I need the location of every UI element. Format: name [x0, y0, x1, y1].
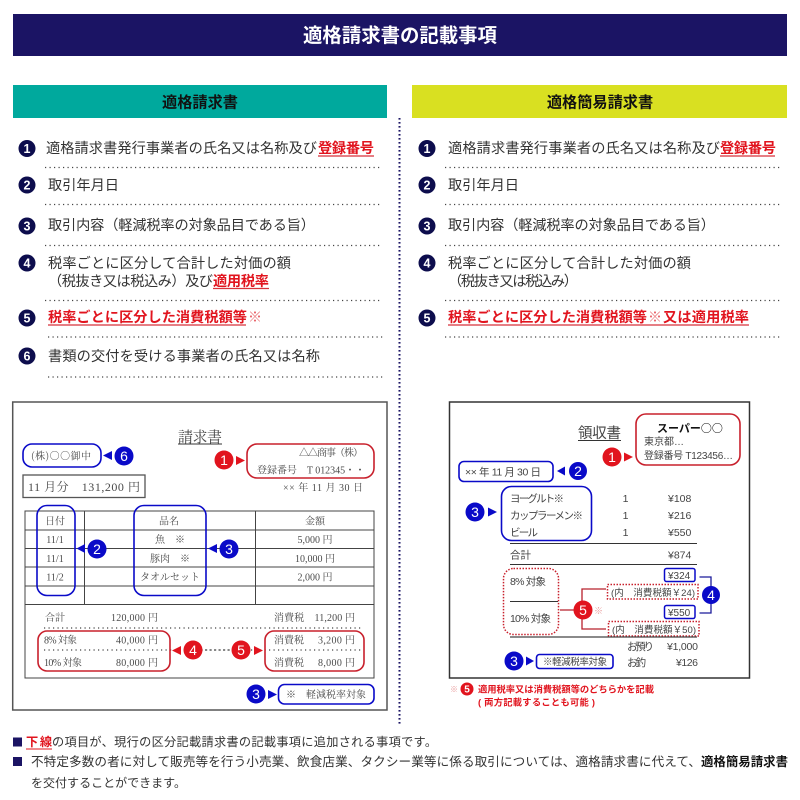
item 5: ※	[648, 309, 662, 325]
invoice table: 40,000 円	[116, 634, 158, 646]
tax rates box	[504, 568, 558, 634]
item 6: 書類の交付を受ける事業者の氏名又は名称	[48, 349, 320, 365]
marker 5 connector: ※	[594, 606, 603, 616]
invoice table: 2,000 円	[298, 572, 332, 584]
invoice table: 消費税	[274, 634, 304, 646]
date box and marker 2	[459, 462, 587, 482]
invoice table: 豚肉 ※	[150, 553, 190, 565]
issuer box and marker 1: △△商事（株）	[299, 444, 363, 459]
item 5: ※	[248, 309, 262, 325]
item 4: 4	[424, 256, 431, 270]
tax rate highlights with markers 4 and 5: 4	[189, 642, 197, 658]
item 2: 2	[24, 178, 31, 192]
heading: 適格請求書	[13, 85, 387, 118]
reduced tax note with marker 3: 3	[252, 686, 260, 702]
invoice table: 品名	[159, 514, 179, 528]
items box and marker 3: ヨーグルト※	[510, 492, 564, 505]
recipient box and marker 6: (株)○○御中	[31, 448, 91, 462]
issuer box and marker 1: 東京都…	[644, 435, 684, 448]
item 3: 3	[24, 220, 31, 234]
panel: 適格請求書 list	[13, 85, 387, 377]
invoice table: 80,000 円	[116, 657, 158, 669]
footer notes	[13, 734, 788, 790]
receipt footnote: ( 両方記載することも可能 )	[478, 696, 595, 708]
invoice title: 請求書	[178, 429, 222, 446]
invoice table: 10,000 円	[295, 553, 335, 565]
payment and change: お預り	[627, 641, 654, 653]
date box and marker 2: 2	[574, 463, 582, 479]
item 4: （税抜き又は税込み）	[448, 274, 578, 290]
panel: 領収書 sample receipt	[450, 402, 750, 678]
items box and marker 3: 3	[471, 504, 479, 520]
item 5: 5	[424, 312, 431, 326]
item 5: 又は適用税率	[663, 309, 749, 326]
invoice table: 消費税	[274, 656, 304, 669]
heading: 適格請求書: 適格請求書	[162, 94, 238, 112]
title: 適格請求書の記載事項	[303, 24, 498, 47]
receipt footnote: 5	[464, 684, 470, 696]
reduced tax note with marker 3	[246, 684, 374, 704]
subtotal boxes	[664, 568, 695, 619]
item 6: 6	[24, 350, 31, 364]
reduced tax note with marker 3: 3	[510, 653, 518, 669]
item 1: 1	[424, 142, 431, 156]
item 2: 取引年月日	[48, 178, 119, 194]
invoice table: 11/1	[46, 535, 64, 546]
reduced tax note with marker 3: ※ 軽減税率対象	[286, 688, 366, 701]
item 5	[418, 309, 749, 326]
recipient box and marker 6: 6	[120, 448, 128, 464]
issuer box and marker 1: 登録番号 T123456…	[644, 449, 733, 462]
payment and change	[627, 641, 698, 669]
date and item name highlights with markers 2 and 3	[37, 506, 238, 596]
tax rate highlights with markers 4 and 5: 5	[237, 642, 245, 658]
date box and marker 2: ×× 年 11 月 30 日	[465, 466, 541, 478]
invoice table: 日付	[45, 514, 65, 528]
items box and marker 3: ビール	[510, 527, 538, 539]
issuer box and marker 1	[602, 414, 740, 466]
quantities and prices: ¥550	[667, 527, 692, 539]
item 4	[18, 254, 291, 290]
date and item name highlights with markers 2 and 3: 2	[93, 541, 101, 557]
recipient box and marker 6	[23, 444, 134, 467]
item 4: 税率ごとに区分して合計した対価の額	[48, 256, 291, 272]
item 2: 取引年月日	[448, 178, 519, 194]
item 3: 取引内容（軽減税率の対象品目である旨）	[448, 217, 715, 234]
item 4: 適用税率	[213, 273, 269, 290]
marker 4 connector: 4	[707, 587, 715, 603]
item 4	[418, 254, 691, 290]
payment and change: ¥126	[675, 657, 698, 669]
date and item name highlights with markers 2 and 3: 3	[225, 541, 233, 557]
item 5: 税率ごとに区分した消費税額等	[48, 309, 247, 326]
payment and change: お釣	[627, 656, 646, 669]
invoice table: 8% 対象	[44, 634, 77, 646]
receipt total: 合計	[510, 548, 531, 562]
issuer box and marker 1: スーパー○○	[657, 420, 723, 436]
item 5: 5	[24, 312, 31, 326]
receipt footnote: 適用税率又は消費税額等のどちらかを記載	[478, 684, 655, 694]
note 2: 不特定多数の者に対して販売等を行う小売業、飲食店業、タクシー業等に係る取引については、適格請求書に代えて、	[31, 754, 701, 769]
items box and marker 3: カップラーメン※	[510, 510, 583, 522]
reduced tax note with marker 3	[504, 652, 613, 670]
quantities and prices: 1	[623, 510, 629, 522]
item 1: 1	[24, 142, 31, 156]
invoice table: 合計	[45, 611, 65, 624]
receipt footnote: ※	[450, 685, 458, 694]
invoice table: 8,000 円	[318, 657, 355, 669]
subtotal boxes: ¥324	[667, 571, 691, 582]
note 2: 適格簡易請求書	[701, 754, 788, 769]
invoice table: タオルセット	[140, 572, 200, 584]
tax rates box: 10% 対象	[510, 612, 552, 625]
invoice table: 120,000 円	[111, 612, 158, 624]
subtotal boxes: ¥550	[667, 608, 691, 619]
quantities and prices: ¥108	[667, 493, 692, 505]
invoice table: 金額	[305, 514, 326, 528]
items box and marker 3	[466, 486, 592, 540]
panel: 適格簡易請求書 list	[412, 85, 787, 337]
item 1: 適格請求書発行事業者の氏名又は名称及び	[46, 141, 317, 157]
item 1: 登録番号	[720, 141, 776, 157]
heading: 適格簡易請求書	[412, 85, 787, 118]
invoice table: 魚 ※	[155, 533, 185, 546]
note 1: の項目が、現行の区分記載請求書の記載事項に追加される事項です。	[52, 734, 437, 749]
quantities and prices: 1	[623, 493, 629, 505]
quantities and prices: 1	[623, 527, 629, 539]
invoice table: 消費税 11,200 円	[274, 611, 355, 624]
central dotted divider	[398, 118, 400, 724]
invoice table	[25, 511, 374, 678]
issuer box and marker 1: ×× 年 11 月 30 日	[283, 481, 363, 494]
invoice table: 11/2	[46, 572, 64, 584]
payment and change: ¥1,000	[666, 641, 698, 653]
invoice table: 3,200 円	[318, 634, 355, 646]
item 2	[18, 176, 119, 194]
invoice total box: 11 月分 131,200 円	[28, 480, 140, 494]
item 4: （税抜き又は税込み）及び	[48, 274, 213, 290]
consumption tax boxes	[608, 584, 699, 636]
item 3: 取引内容（軽減税率の対象品目である旨）	[48, 217, 315, 234]
invoice table: 10% 対象	[44, 656, 82, 669]
item 5: 税率ごとに区分した消費税額等	[448, 309, 647, 326]
consumption tax boxes: (内 消費税額￥24)	[611, 587, 695, 599]
receipt title: 領収書	[578, 425, 621, 442]
item 2	[418, 176, 519, 194]
issuer box and marker 1	[214, 444, 374, 494]
tax rates box: 8% 対象	[510, 575, 546, 588]
title	[13, 14, 787, 56]
issuer box and marker 1: 1	[220, 452, 228, 468]
invoice total box	[23, 475, 145, 498]
marker 5 connector: 5	[579, 602, 587, 618]
panel: 請求書 sample invoice	[13, 402, 387, 710]
reduced tax note with marker 3: ※軽減税率対象	[543, 656, 607, 668]
quantities and prices	[623, 493, 692, 539]
item 3: 3	[424, 220, 431, 234]
heading: 適格簡易請求書: 適格簡易請求書	[547, 94, 653, 112]
receipt total: ¥874	[667, 550, 692, 562]
note 2	[13, 754, 788, 790]
invoice table: 11/1	[46, 554, 64, 565]
quantities and prices: ¥216	[667, 510, 692, 522]
receipt footnote	[450, 682, 655, 708]
tax rate highlights with markers 4 and 5	[38, 631, 364, 671]
issuer box and marker 1: 1	[608, 449, 616, 465]
receipt total	[510, 544, 697, 564]
item 2: 2	[424, 178, 431, 192]
issuer box and marker 1: 登録番号 T 012345・・	[257, 464, 365, 476]
invoice table: 5,000 円	[298, 534, 332, 546]
item 1: 適格請求書発行事業者の氏名又は名称及び	[448, 141, 720, 157]
marker 4 connector	[700, 577, 720, 613]
consumption tax boxes: (内 消費税額￥50)	[612, 624, 696, 636]
item 4: 税率ごとに区分して合計した対価の額	[448, 256, 691, 272]
marker 5 connector	[560, 589, 606, 629]
item 4: 4	[24, 256, 31, 270]
note 1: 下線	[26, 734, 53, 749]
note 2: を交付することができます。	[31, 775, 186, 790]
item 1: 登録番号	[318, 141, 374, 157]
